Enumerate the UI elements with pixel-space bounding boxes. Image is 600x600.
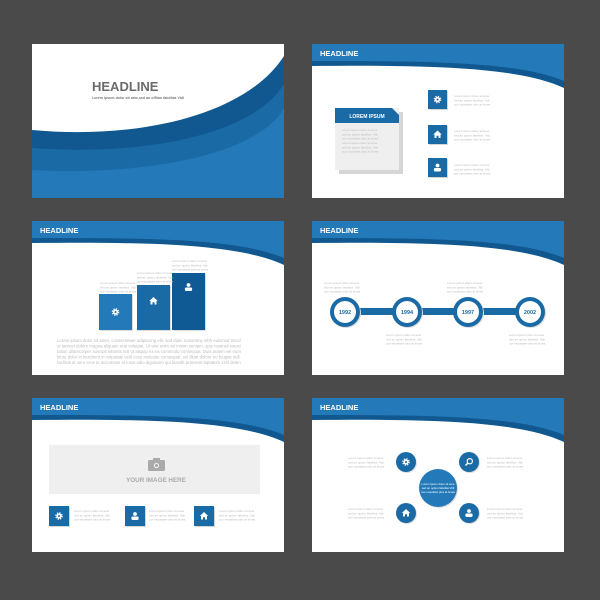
paragraph: tation ullamcorper suscipit lobortis nisl ut aliquip ex ea commodo consequat. Duis autem vel eum xyxy=(57,349,241,354)
lorem ipsum box: LOREM IPSUM xyxy=(349,114,385,120)
icon rows xyxy=(428,90,491,178)
title text: HEADLINE xyxy=(92,79,159,94)
title text xyxy=(92,79,184,100)
slide 2: lorem box with icons xyxy=(312,44,564,198)
paragraph: ut laoreet dolore magna aliquam erat volutpat. Ut wisi enim ad minim veniam, quis nostrud exerci xyxy=(57,344,241,348)
slide 6: hub diagram xyxy=(312,398,564,552)
hub diagram xyxy=(348,452,524,524)
icon items xyxy=(49,506,256,527)
bar chart xyxy=(99,259,209,331)
slide 5: image placeholder xyxy=(32,398,284,552)
slide 4: timeline xyxy=(312,221,564,375)
timeline: 1997 xyxy=(462,310,474,316)
hub diagram: sed an option fabellas Vidi xyxy=(422,486,455,490)
paragraph: Lorem ipsum dolor sit amet, consectetuer adipiscing elit, sed diam nonummy nibh euismod tincid xyxy=(57,338,241,343)
hub diagram: Lorem ipsum dolor sit ame xyxy=(422,482,455,486)
timeline xyxy=(324,281,546,346)
paragraph: iriure dolor in hendrerit in vulputate velit esse molestie consequat, vel illum dolore eu feugiat null xyxy=(57,354,240,360)
slide 1: title xyxy=(32,44,284,198)
slide 3: bar chart xyxy=(32,221,284,375)
lorem ipsum box xyxy=(335,108,403,174)
image placeholder: YOUR IMAGE HERE xyxy=(126,477,186,484)
image placeholder xyxy=(49,445,260,494)
timeline: 1994 xyxy=(401,310,414,316)
paragraph: facilisis at vero eros et accumsan et iusto odio dignissim qui blandit praesent luptatum zzril delen xyxy=(57,360,241,365)
hub diagram: cue repudiare plus at timea xyxy=(421,490,455,494)
title text: Lorem ipsum dolor sit ame,sed an offiian fabellas Vidi xyxy=(92,96,184,100)
timeline: 2002 xyxy=(524,310,536,316)
timeline: 1992 xyxy=(339,310,351,316)
